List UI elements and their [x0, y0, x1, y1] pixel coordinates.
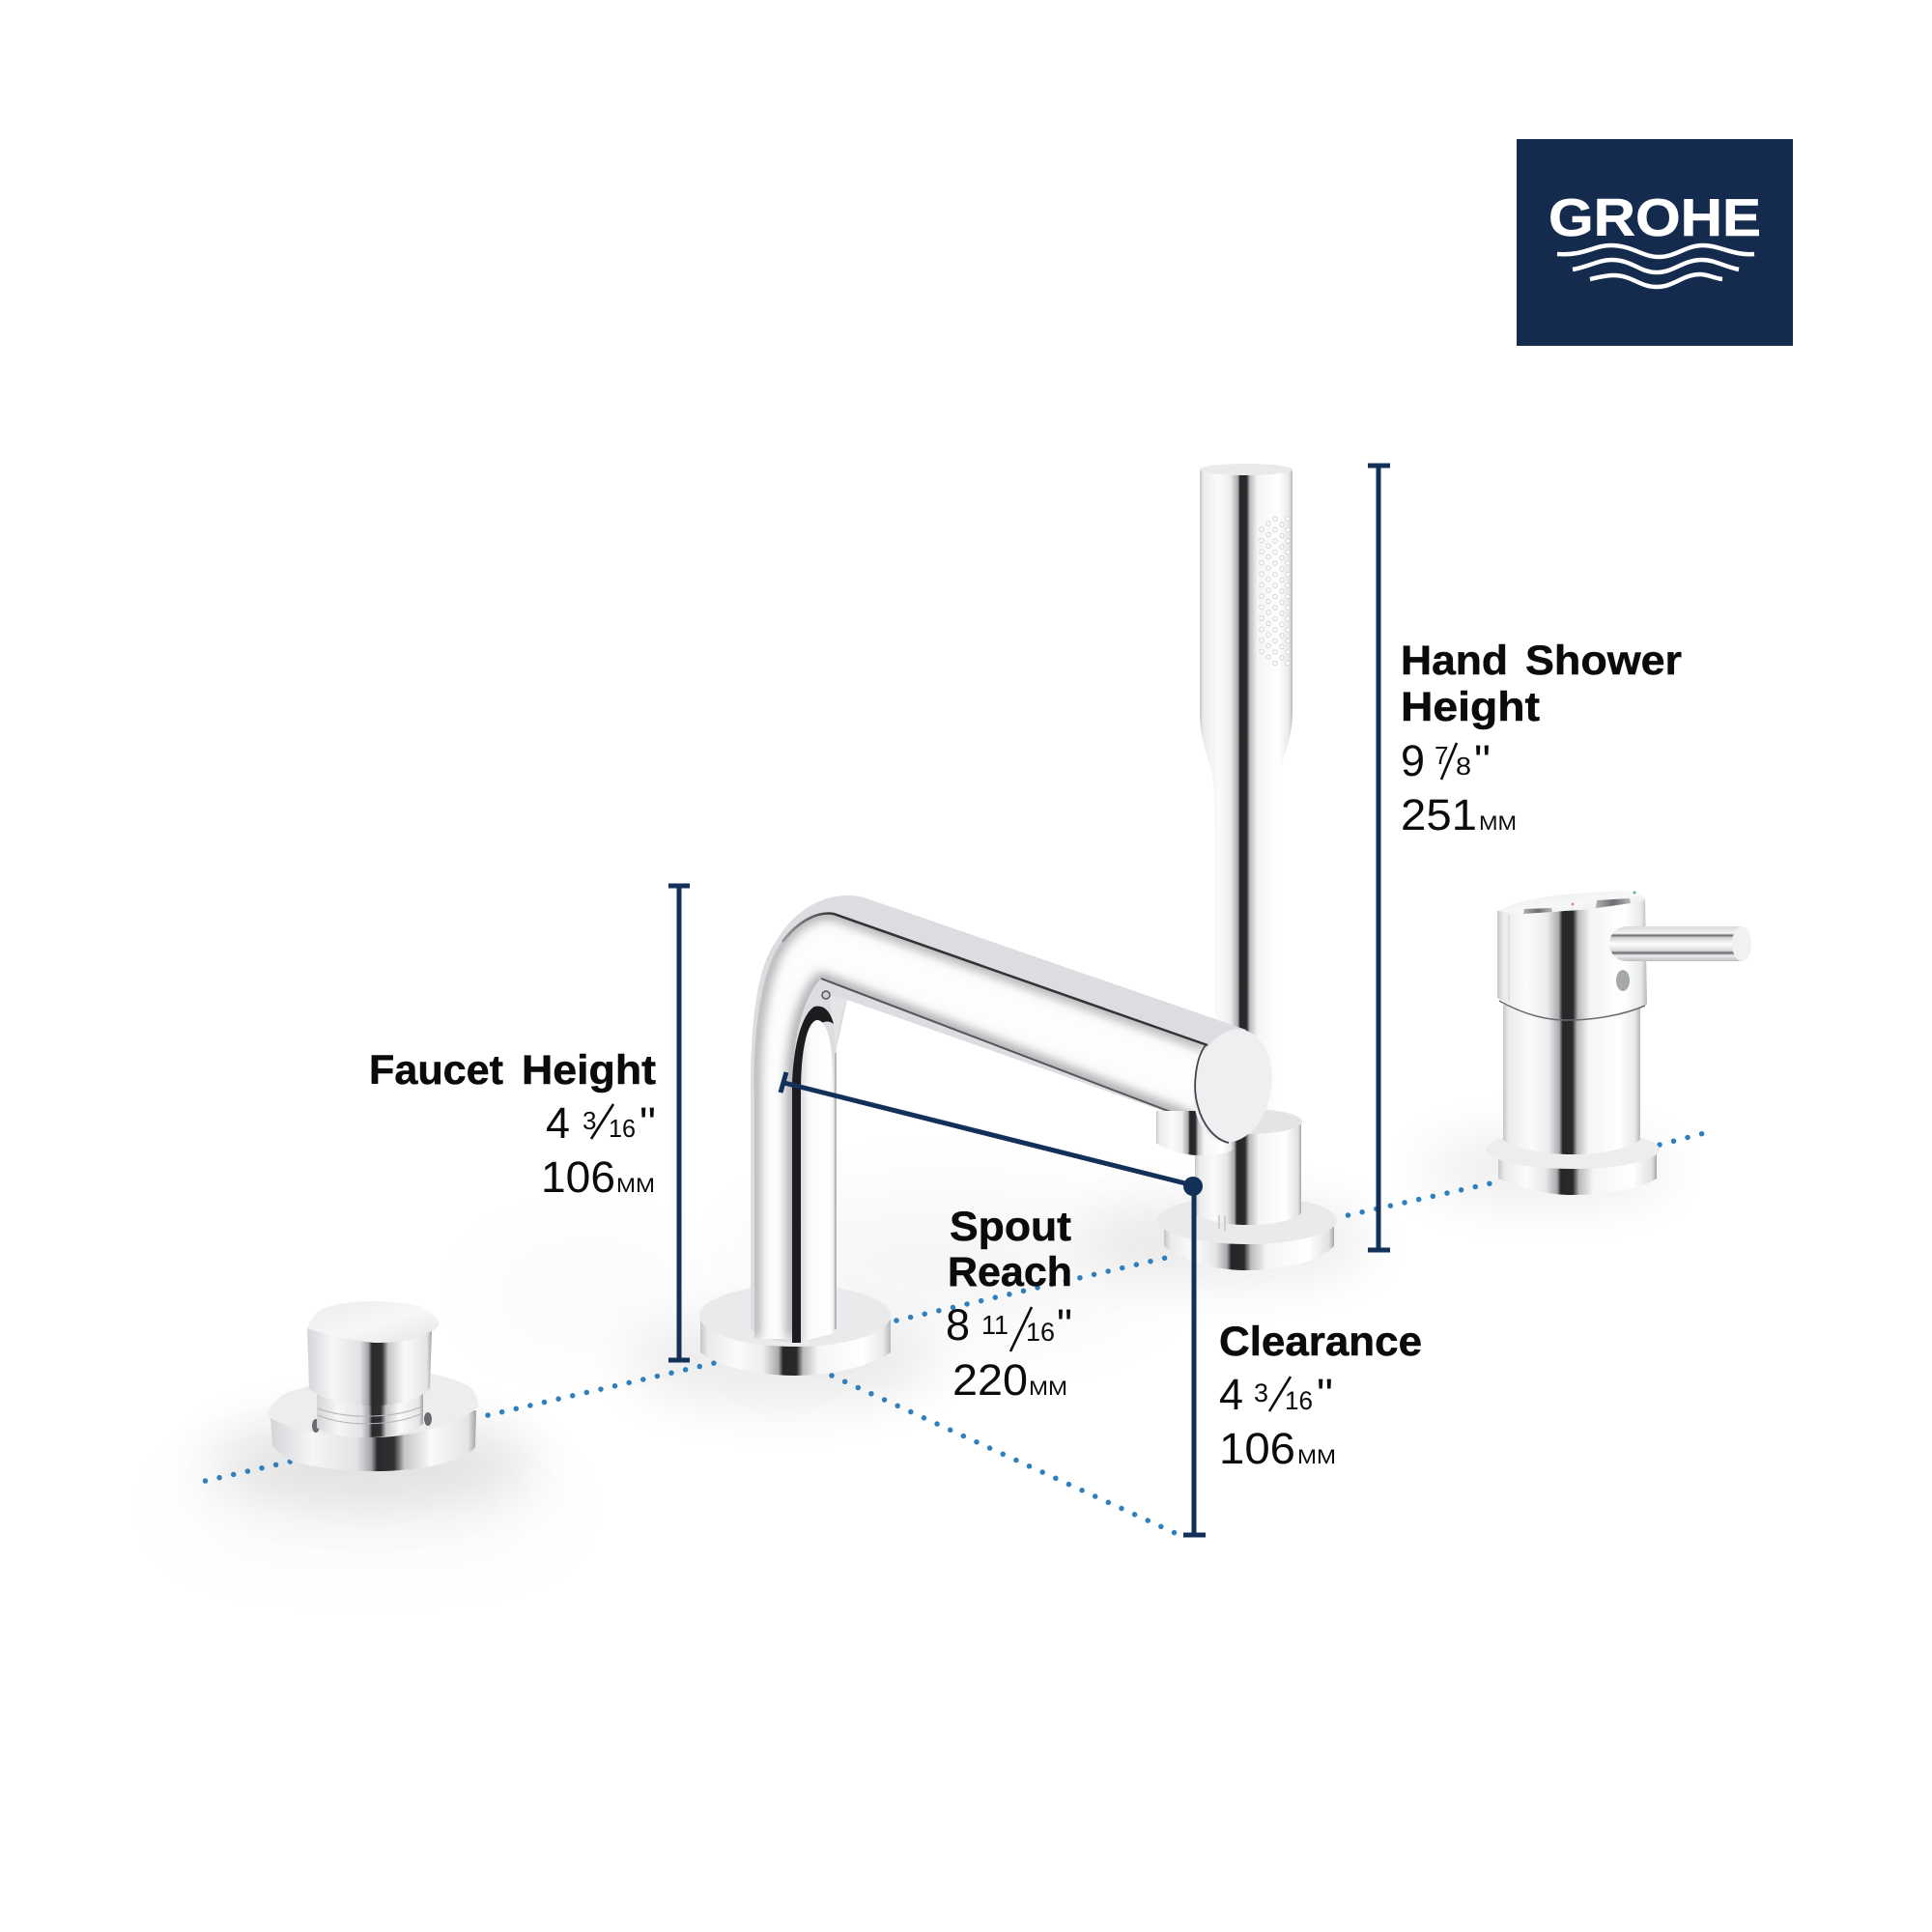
icon: mixer lever	[1611, 926, 1751, 961]
dotted floor guide lines	[205, 1130, 1716, 1533]
dimension: spout reach	[781, 1072, 1193, 1185]
logo: GROHE: GROHE	[1548, 187, 1761, 247]
label: clearance: 4	[1219, 1370, 1243, 1419]
label: faucet height	[369, 1047, 656, 1202]
label: hand shower height	[1401, 638, 1682, 839]
label: clearance: 106	[1219, 1424, 1295, 1473]
label: faucet height: 16	[609, 1114, 636, 1143]
label: faucet height: 3	[582, 1106, 596, 1135]
label: hand shower height: 9	[1401, 736, 1425, 785]
icon: mixer base	[1486, 1005, 1660, 1195]
label: clearance: "	[1317, 1370, 1333, 1419]
label: hand shower height: 7	[1435, 741, 1448, 770]
label: hand shower height: 8	[1456, 752, 1471, 781]
label: spout reach	[946, 1204, 1072, 1405]
icon: spout base disc	[699, 1285, 891, 1376]
icon: mixer lever front	[1609, 926, 1751, 961]
label: clearance: MM	[1297, 1446, 1336, 1468]
dimension: faucet height	[668, 885, 690, 1360]
icon: mixer head	[1497, 891, 1647, 1020]
label: spout reach: 8	[946, 1300, 970, 1350]
icon: shower base	[1157, 1109, 1337, 1270]
label: clearance: 16	[1285, 1386, 1313, 1415]
label: faucet height: 106	[541, 1152, 615, 1202]
label: spout reach: Reach	[948, 1249, 1072, 1295]
label: spout reach: "	[1057, 1300, 1072, 1350]
icon: knob	[268, 1301, 478, 1471]
label: spout reach: 220	[952, 1355, 1028, 1405]
logo: GROHE	[1517, 139, 1793, 346]
label: hand shower height: Hand	[1401, 638, 1508, 684]
label: hand shower height: "	[1474, 736, 1491, 785]
label: spout reach: Spout	[950, 1204, 1071, 1250]
icon: spout end cap	[1184, 1023, 1281, 1149]
floor shadows	[155, 1135, 1671, 1546]
label: spout reach: 11	[981, 1310, 1009, 1340]
label: hand shower height: MM	[1479, 812, 1517, 835]
label: spout reach: 16	[1026, 1318, 1055, 1347]
dimension: clearance	[1183, 1177, 1206, 1535]
icon: hand shower	[1200, 464, 1293, 1150]
label: faucet height: MM	[616, 1175, 655, 1197]
icon: spout tube and bend	[751, 895, 1246, 1343]
label: faucet height: "	[639, 1098, 656, 1148]
label: hand shower height: 251	[1401, 790, 1477, 839]
label: faucet height: Faucet	[369, 1047, 503, 1094]
label: spout reach: MM	[1029, 1378, 1067, 1400]
label: clearance: Clearance	[1219, 1319, 1422, 1365]
dimension: hand shower height	[1368, 465, 1390, 1250]
label: faucet height: 4	[546, 1098, 570, 1148]
label: hand shower height: Shower	[1525, 638, 1682, 684]
icon: spout cup	[1156, 1111, 1234, 1155]
label: hand shower height: Height	[1401, 684, 1540, 730]
label: clearance	[1219, 1319, 1422, 1473]
label: clearance: 3	[1254, 1378, 1268, 1407]
label: faucet height: Height	[522, 1047, 656, 1094]
